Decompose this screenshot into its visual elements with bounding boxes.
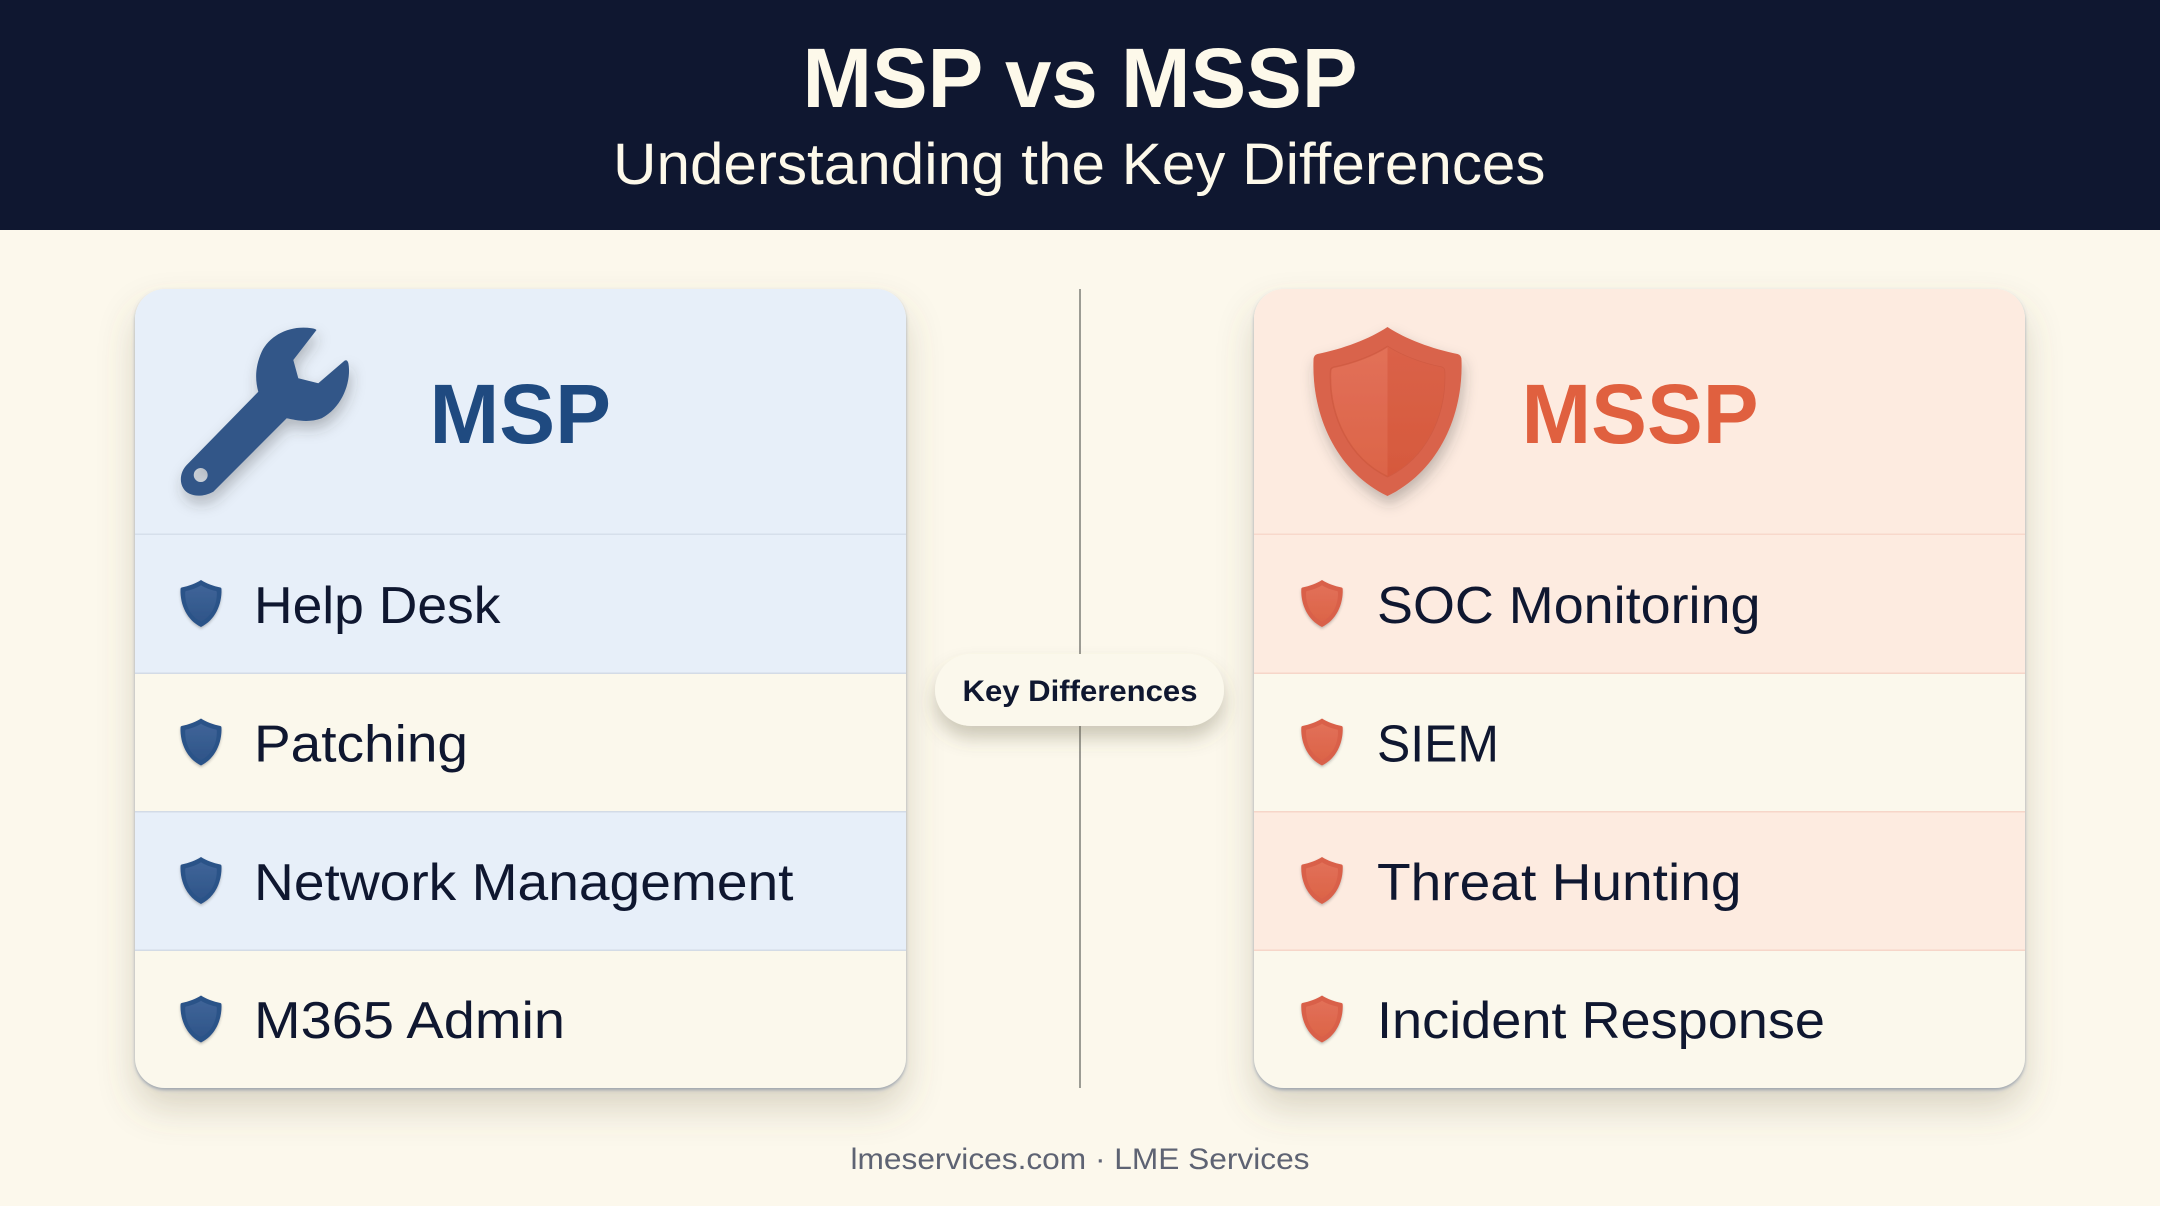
item: Patching: Patching — [254, 716, 468, 774]
item: SIEM: SIEM — [1377, 716, 1499, 774]
panel header background: MSP — [135, 289, 906, 673]
icon: small shield — [1301, 580, 1343, 627]
icon: small shield — [180, 857, 222, 904]
panel header background: MSSP — [1254, 289, 2025, 673]
heading: MSSP: MSSP — [1522, 367, 1758, 461]
subtitle: Understanding the Key Differences — [613, 132, 1546, 197]
icon: small shield — [180, 996, 222, 1042]
item: Incident Response: Incident Response — [1377, 992, 1825, 1050]
item: Network Management: Network Management — [254, 854, 794, 912]
icon: small shield — [180, 580, 222, 627]
badge: Key Differences: Key Differences — [962, 675, 1198, 708]
icon: large shield — [1313, 327, 1462, 496]
icon: small shield — [180, 718, 222, 765]
item: SOC Monitoring: SOC Monitoring — [1377, 577, 1760, 635]
icon: small shield — [1301, 718, 1343, 765]
icon: wrench — [181, 328, 349, 496]
item: M365 Admin: M365 Admin — [254, 992, 565, 1050]
header band — [0, 0, 2160, 230]
footer: lmeservices.com · LME Services — [850, 1143, 1310, 1176]
panel: MSP — [135, 289, 906, 1088]
item: SIEM — [1301, 716, 1499, 774]
panel: MSSP — [1254, 289, 2025, 1088]
icon: small shield — [1301, 996, 1343, 1042]
heading: MSP: MSP — [430, 367, 611, 461]
icon: small shield — [1301, 857, 1343, 904]
title: MSP vs MSSP — [802, 31, 1358, 125]
item: Threat Hunting: Threat Hunting — [1377, 854, 1742, 912]
center divider line — [1079, 289, 1081, 1088]
item: Help Desk: Help Desk — [254, 577, 502, 635]
badge: Key Differences — [935, 654, 1224, 726]
